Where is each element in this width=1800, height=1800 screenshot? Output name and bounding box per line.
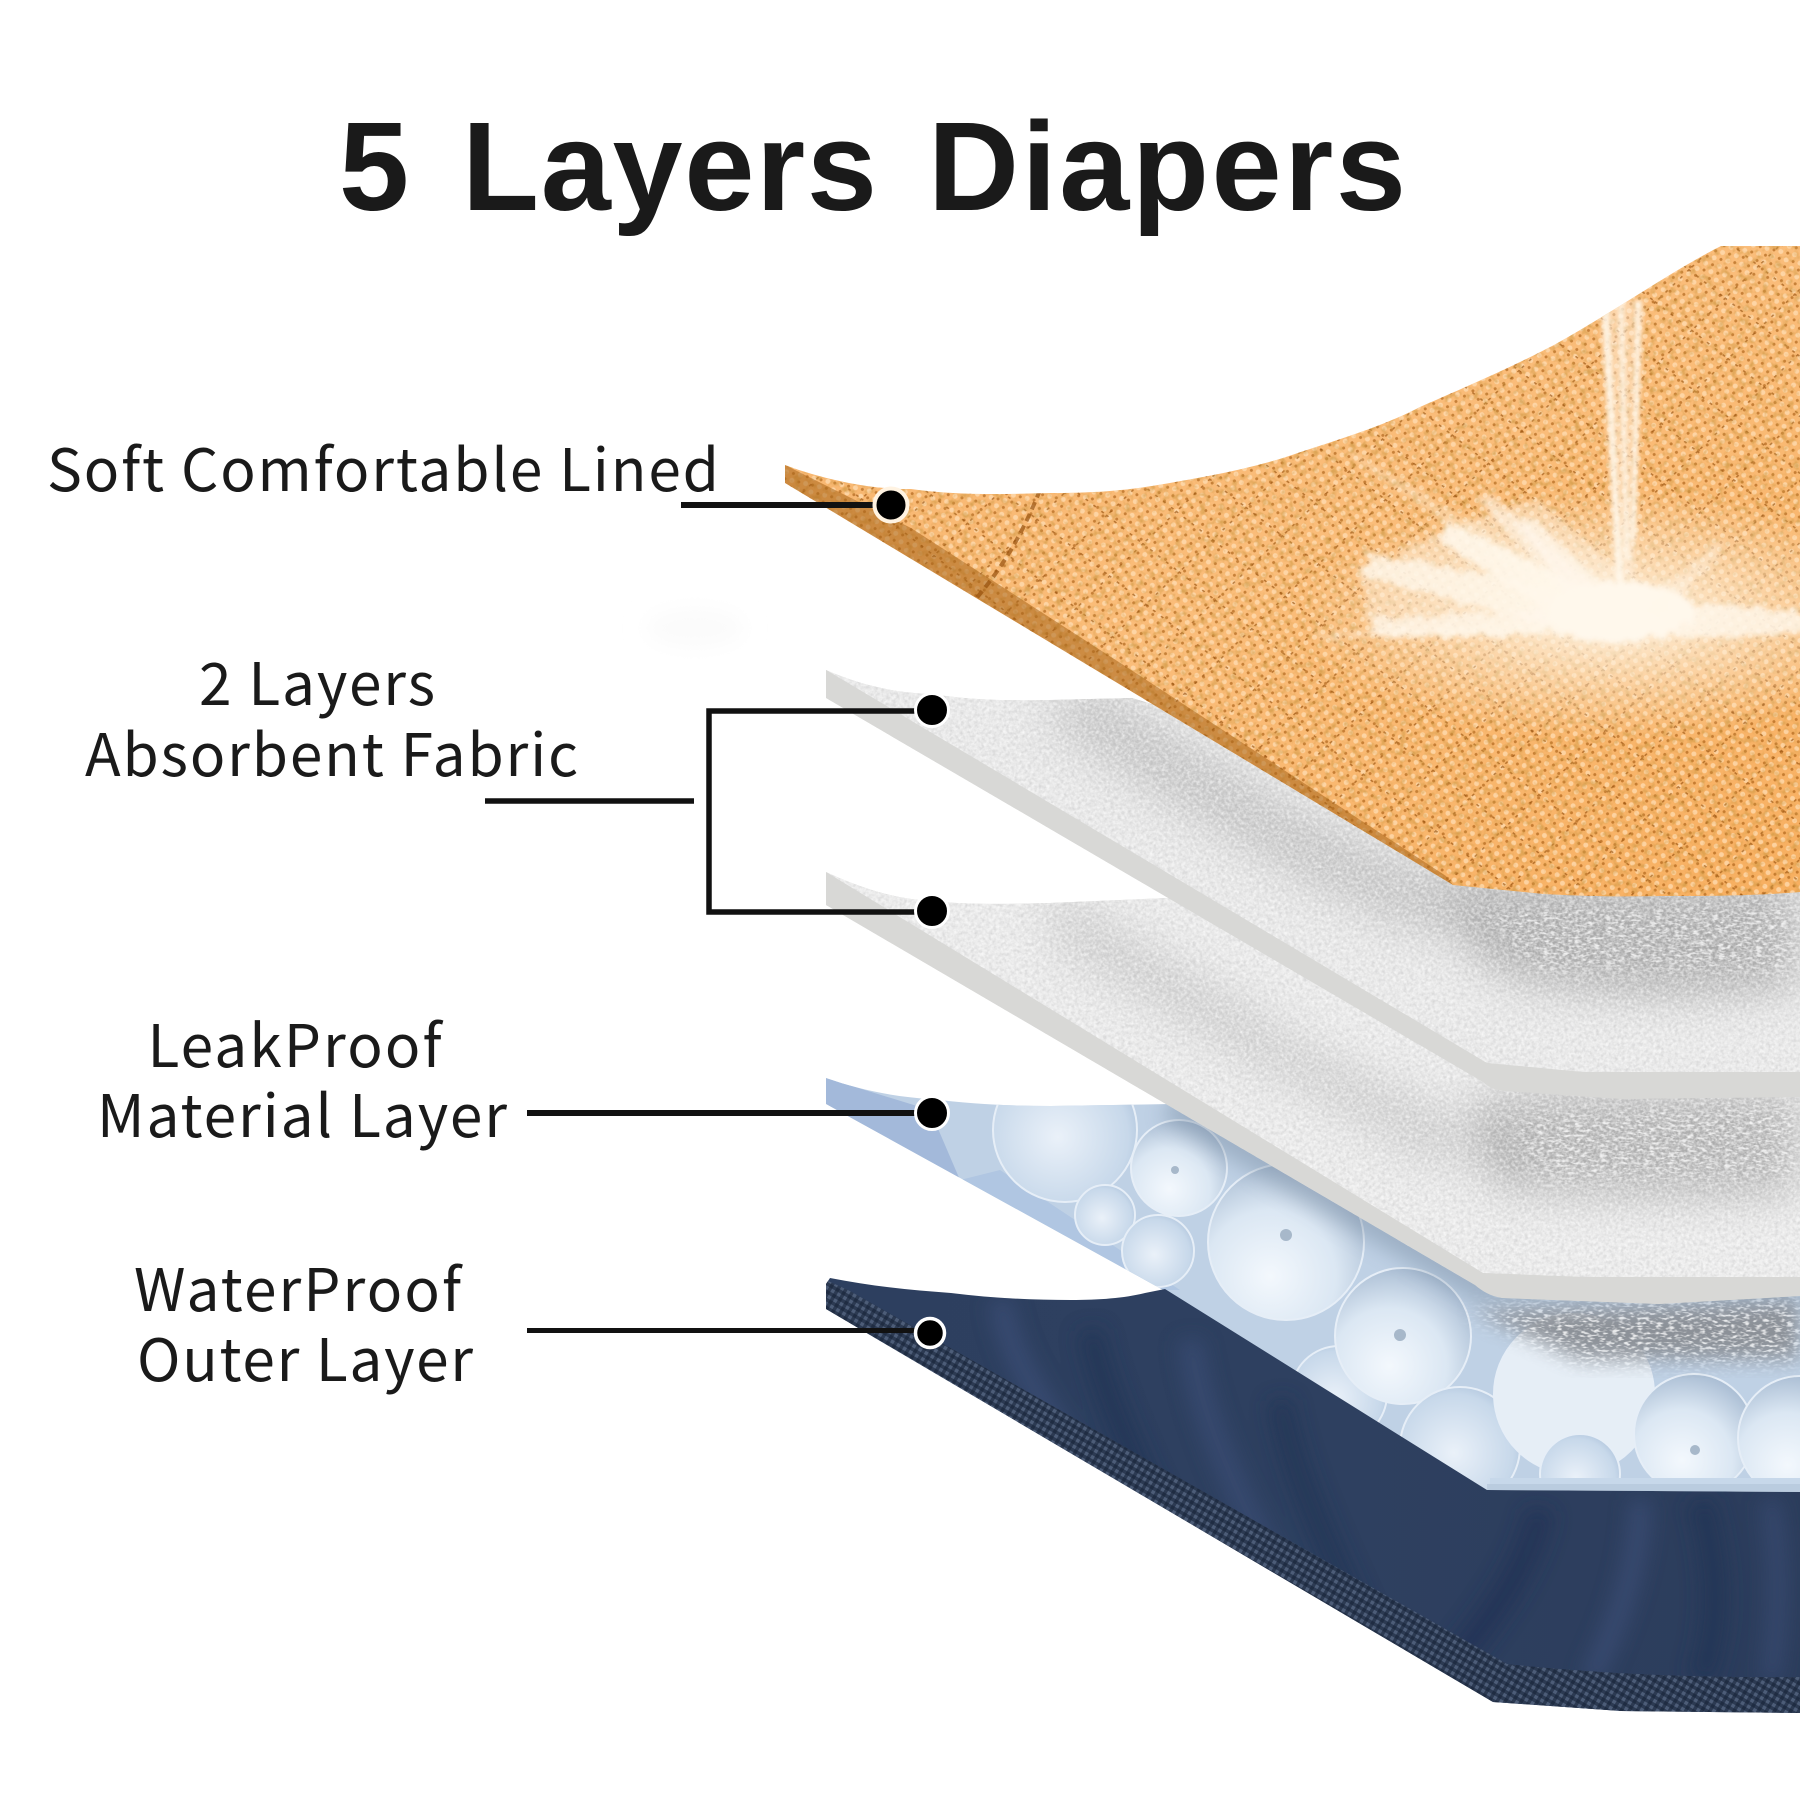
panel: absorbent fabric layer 1 — [820, 660, 1800, 1110]
panel: leakproof material layer with water beads — [820, 1058, 1800, 1514]
label: Soft Comfortable Lined — [47, 423, 719, 508]
label — [134, 1243, 473, 1398]
marker dots — [916, 694, 948, 928]
leader bracket — [485, 711, 925, 912]
callout: waterproof outer layer — [134, 1243, 944, 1398]
top surface — [826, 870, 1800, 1277]
label: WaterProof — [134, 1243, 463, 1328]
callout: soft comfortable lined — [47, 423, 908, 522]
callout: leakproof material layer — [97, 999, 948, 1154]
diagonal shadow under upper layer — [1040, 880, 1480, 1170]
right-hand fuzzy shadow — [1472, 1090, 1800, 1196]
label — [85, 637, 578, 793]
panel: absorbent fabric layer 2 — [820, 860, 1800, 1310]
splash fan — [1360, 500, 1640, 640]
marker dot — [916, 1318, 944, 1348]
top surface — [826, 670, 1800, 1072]
marker dot — [916, 1096, 948, 1130]
dark seam band — [785, 465, 1453, 885]
gray fibre shadow — [1473, 1296, 1800, 1374]
water bead highlights — [1171, 1166, 1700, 1455]
fibre highlights — [1501, 1098, 1800, 1191]
label — [97, 999, 507, 1154]
navy cut edge band — [820, 1280, 1800, 1720]
marker dot — [874, 488, 908, 522]
splash rays — [1319, 452, 1800, 642]
leader line — [681, 502, 881, 508]
panel: waterproof outer layer — [820, 1270, 1800, 1720]
water splash — [1300, 300, 1800, 740]
leader line — [527, 1110, 922, 1116]
right-hand fuzzy shadow — [1440, 880, 1800, 994]
label: Outer Layer — [137, 1313, 473, 1398]
label: Absorbent Fabric — [85, 708, 578, 793]
falling water stream — [1600, 300, 1644, 600]
title: Layers — [462, 96, 877, 237]
label: Material Layer — [97, 1069, 507, 1154]
label: 2 Layers — [199, 637, 435, 722]
fibre highlights — [1476, 896, 1800, 983]
soft glow — [1300, 490, 1800, 740]
terry texture — [820, 860, 1800, 1280]
terry texture — [820, 660, 1800, 1080]
title: Diapers — [928, 96, 1406, 237]
label: LeakProof — [148, 999, 443, 1084]
title: 5 — [339, 96, 409, 237]
diagonal shadow under orange layer — [1040, 680, 1470, 940]
water bead circles — [992, 1104, 1800, 1490]
callout: 2 layers absorbent fabric — [85, 637, 948, 928]
knit texture — [780, 240, 1800, 900]
fabric folds — [1000, 1300, 1778, 1680]
panel: soft comfortable lined orange layer — [780, 240, 1800, 900]
leader line — [527, 1328, 917, 1333]
